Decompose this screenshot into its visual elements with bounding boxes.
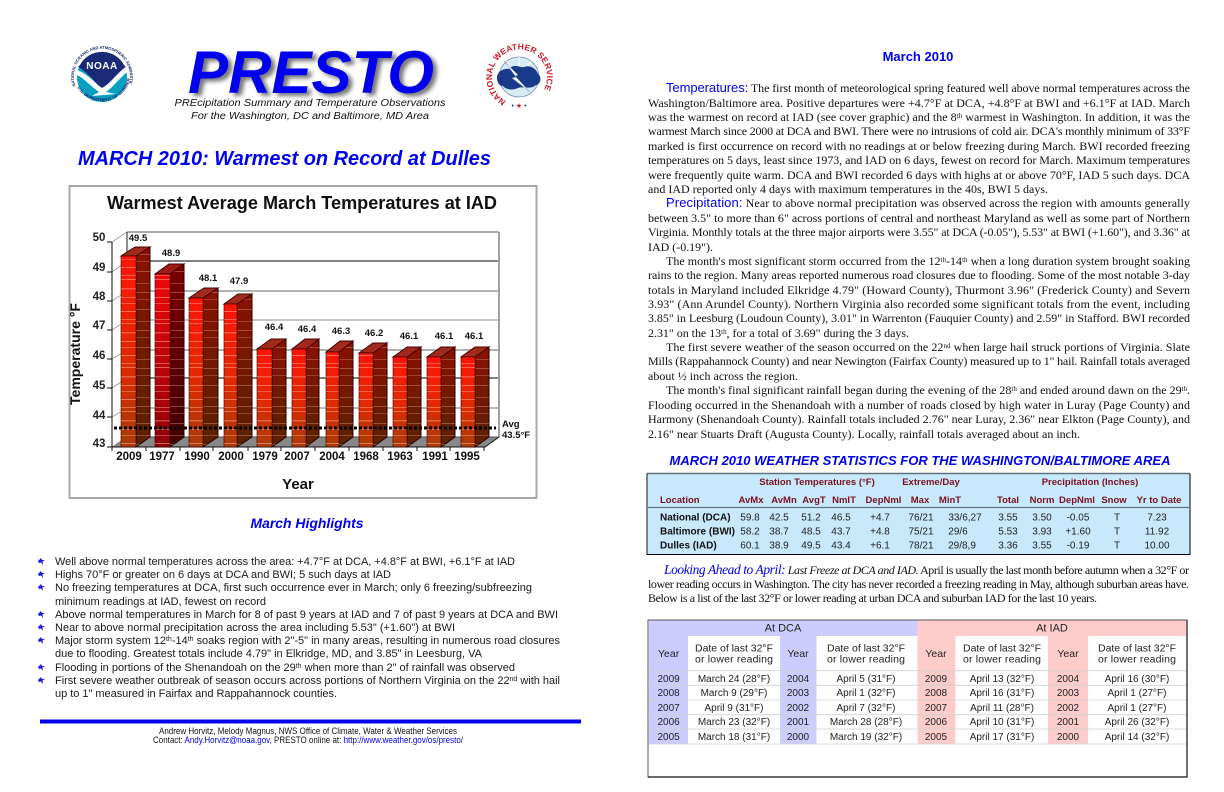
row: 2008 / 2003: March 9 (29°F) bbox=[701, 688, 767, 699]
y axis labels: 45 bbox=[93, 380, 106, 392]
table row: Baltimore: Baltimore (BWI) bbox=[660, 526, 735, 538]
table row: Dulles: 78/21 bbox=[908, 540, 934, 552]
table row: Baltimore: 43.7 bbox=[831, 526, 851, 538]
text block: highlights list: nd bbox=[510, 676, 517, 683]
table row: National: 3.55 bbox=[998, 512, 1018, 524]
x axis year labels: 2000 bbox=[218, 451, 244, 463]
text block: precipitation: when large hail struck portions of Virginia. Slate bbox=[951, 340, 1190, 354]
row: 2009 / 2004: 2009 bbox=[657, 674, 680, 685]
text block: temperatures bbox=[648, 80, 1190, 196]
table header: AvMn bbox=[771, 495, 797, 506]
footer rule bbox=[40, 720, 581, 724]
text block: looking ahead to April: Looking Ahead to April: Last Freeze at DCA and IAD. April is usually the last month before autumn when a 32°F or bbox=[663, 562, 1189, 577]
table row: National: 59.8 bbox=[740, 512, 760, 524]
row: 2007 / 2002: April 11 (28°F) bbox=[970, 703, 1034, 714]
text block: highlights list: First severe weather outbreak of season occurs across portions of Northern Virginia on the 22 bbox=[55, 675, 510, 687]
text block: precipitation: 2.31" on the 13 bbox=[648, 326, 721, 340]
table row: National: -0.05 bbox=[1067, 512, 1090, 524]
table row: National: 33/6,27 bbox=[948, 512, 982, 524]
text block: highlights list: -14 bbox=[172, 635, 188, 647]
subtitle bbox=[174, 97, 446, 122]
bar value labels: 49.5 bbox=[129, 233, 148, 244]
row: 2005 / 2000: 2005 bbox=[925, 732, 948, 743]
text block: precipitation: The month's final significant rainfall began during the evening of the 28 bbox=[666, 383, 1011, 397]
row: 2007 / 2002: 2002 bbox=[787, 703, 810, 714]
row: 2005 / 2000: 2000 bbox=[1057, 732, 1080, 743]
row: 2006 / 2001 bbox=[657, 717, 1169, 728]
table header: AvgT bbox=[802, 495, 826, 506]
row: 2008 / 2003 bbox=[657, 688, 1167, 699]
row: 2006 / 2001: 2001 bbox=[1057, 717, 1080, 728]
text block: precipitation: between 3.5" to more than 6" across portions of central and northeast Maryland as well as some part of Northern bbox=[648, 211, 1190, 225]
row: 2005 / 2000 bbox=[657, 732, 1169, 743]
table header: DepNml bbox=[866, 495, 901, 506]
column headers: Date of last 32°F bbox=[827, 642, 905, 654]
text block: highlights list: Near to above normal precipitation across the area including 5.53" (+1.60") at BWI bbox=[55, 622, 455, 634]
bar: 1979 bbox=[257, 339, 286, 447]
text block: precipitation: th bbox=[941, 256, 947, 264]
bar value labels: 47.9 bbox=[230, 276, 248, 287]
text block: precipitation: 2.16" near Stuarts Draft (Augusta County). Locally, rainfall totals averaged about an inch. bbox=[648, 427, 1080, 441]
row: 2006 / 2001: 2006 bbox=[925, 717, 948, 728]
table row: Dulles: 60.1 bbox=[740, 540, 760, 552]
table row: Baltimore: 38.7 bbox=[769, 526, 789, 538]
table row: Baltimore: 75/21 bbox=[908, 526, 934, 538]
table header: MinT bbox=[939, 495, 961, 506]
bar value labels: 46.1 bbox=[465, 331, 484, 342]
text block: temperatures: marked is first occurrence on record with no readings at or below freezing during March. BWI recorded freezing bbox=[648, 139, 1190, 153]
row: 2006 / 2001: March 23 (32°F) bbox=[698, 717, 770, 728]
text block: precipitation: . bbox=[1187, 383, 1190, 397]
table row: National: T bbox=[1114, 512, 1120, 524]
text block: highlights list: th bbox=[166, 636, 172, 643]
table row: Baltimore bbox=[660, 526, 1170, 538]
icon: NOAA logo: NOAA bbox=[86, 61, 118, 72]
row: 2008 / 2003: 2008 bbox=[925, 688, 948, 699]
bar: 2009 bbox=[121, 247, 150, 447]
x axis year labels: 1995 bbox=[454, 451, 480, 463]
x axis year labels: 2007 bbox=[284, 451, 310, 463]
text block: precipitation: Precipitation: Near to above normal precipitation was observed across the region with amounts generally bbox=[666, 195, 1190, 210]
text block: highlights list: when more than 2" of rainfall was observed bbox=[302, 662, 515, 674]
text block: highlights list: Flooding in portions of the Shenandoah on the 29 bbox=[55, 662, 296, 674]
text block: precipitation bbox=[648, 195, 1191, 441]
table row: Dulles: 43.4 bbox=[831, 540, 851, 552]
y axis labels: 43 bbox=[93, 438, 105, 450]
column headers: Year bbox=[925, 648, 947, 660]
table row: National: 3.50 bbox=[1032, 512, 1052, 524]
text block: looking ahead to April: lower reading occurs in Washington. The city has never recorded a freezing reading in May, although suburban areas have. bbox=[648, 577, 1189, 591]
table header: NmIT bbox=[832, 495, 856, 506]
row: 2007 / 2002 bbox=[657, 703, 1167, 714]
text block: highlights list: with hail bbox=[517, 675, 560, 687]
footer credits: Contact: Andy.Horvitz@noaa.gov, PRESTO online at: http://www.weather.gov/os/presto/ bbox=[153, 735, 463, 745]
text block: highlights list: Well above normal temperatures across the area: +4.7°F at DCA, +4.8°F at BWI, +6.1°F at IAD bbox=[55, 556, 515, 568]
row: 2005 / 2000: March 18 (31°F) bbox=[698, 732, 770, 743]
headline: MARCH 2010: Warmest on Record at Dulles bbox=[78, 148, 491, 170]
bar value labels: 46.3 bbox=[332, 326, 350, 337]
row: 2006 / 2001: 2006 bbox=[657, 717, 680, 728]
text block: precipitation: The month's most significant storm occurred from the 12 bbox=[666, 254, 941, 268]
table row: National: 42.5 bbox=[769, 512, 789, 524]
text block: highlights list: soaks region with 2"-5" in many areas, resulting in numerous road closures bbox=[194, 635, 561, 647]
column headers: or lower reading bbox=[827, 654, 905, 666]
table row: Dulles: Dulles (IAD) bbox=[660, 540, 717, 552]
table header: Station Temperatures (°F) bbox=[759, 477, 875, 488]
text block: highlights list: minimum readings at IAD, fewest on record bbox=[55, 596, 266, 608]
table row: Dulles: 49.5 bbox=[801, 540, 821, 552]
row: 2007 / 2002: April 7 (32°F) bbox=[836, 703, 896, 714]
text block: precipitation: th bbox=[721, 328, 727, 336]
table row: Baltimore: +4.8 bbox=[870, 526, 890, 538]
column headers: Year bbox=[1057, 648, 1079, 660]
text block: precipitation: 3.85" in Leesburg (Loudoun County), 3.01" in Warrenton (Fauquier County) and 2.59" in Stafford. BWI recorded bbox=[648, 311, 1190, 325]
average label: Avg bbox=[502, 419, 520, 430]
row: 2009 / 2004: April 13 (32°F) bbox=[970, 674, 1034, 685]
bar: 1963 bbox=[393, 347, 421, 447]
text block: precipitation: totals in Maryland included Elkridge 4.79" (Howard County), Thurmont 3.96" (Frederick County) and Severn bbox=[648, 283, 1190, 297]
bar: 2004 bbox=[326, 341, 353, 447]
text block: highlights list: up to 1" measured in Fairfax and Rappahannock counties. bbox=[55, 688, 337, 700]
text block: highlights list: th bbox=[188, 636, 194, 643]
table row: Baltimore: 29/6 bbox=[948, 526, 968, 538]
table header: Precipitation (Inches) bbox=[1042, 477, 1138, 488]
icon: National Weather Service logo: NATIONAL WEATHER SERVICE bbox=[486, 44, 553, 106]
text block: temperatures: warmest March since 2000 at DCA and BWI. There were no intrusions of cold air. DCA's monthly minimum of 33°F bbox=[648, 124, 1190, 138]
table: weather statistics bbox=[647, 474, 1190, 554]
row: 2006 / 2001: April 26 (32°F) bbox=[1105, 717, 1169, 728]
table row: National: 76/21 bbox=[908, 512, 934, 524]
table row: Dulles: 29/8,9 bbox=[948, 540, 976, 552]
text block: highlights list: th bbox=[296, 663, 302, 670]
subtitle: PREcipitation Summary and Temperature Observations bbox=[174, 97, 446, 109]
bar: 2007 bbox=[292, 339, 319, 447]
table header: Location bbox=[660, 495, 700, 506]
y axis labels: 46 bbox=[93, 350, 105, 362]
x axis year labels: 1991 bbox=[422, 451, 448, 463]
row: 2006 / 2001: March 28 (28°F) bbox=[830, 717, 902, 728]
row: 2009 / 2004: 2004 bbox=[787, 674, 810, 685]
column headers bbox=[658, 642, 1176, 666]
table row: Dulles: 3.55 bbox=[1032, 540, 1052, 552]
y axis labels: 49 bbox=[93, 262, 105, 274]
subtitle: For the Washington, DC and Baltimore, MD Area bbox=[191, 110, 429, 122]
x axis year labels: 1977 bbox=[149, 451, 175, 463]
row: 2006 / 2001: April 10 (31°F) bbox=[970, 717, 1034, 728]
column headers: Date of last 32°F bbox=[695, 642, 773, 654]
x axis year labels: 1990 bbox=[184, 451, 210, 463]
chart walls and gridlines bbox=[107, 232, 499, 451]
text block: precipitation: -14 bbox=[946, 254, 962, 268]
table row: Dulles: T bbox=[1114, 540, 1120, 552]
row: 2008 / 2003: 2003 bbox=[1057, 688, 1080, 699]
table row: National: +4.7 bbox=[870, 512, 890, 524]
bar value labels: 46.2 bbox=[365, 328, 383, 339]
text block: highlights list: due to flooding. Greatest totals include 4.79" in Elkridge, MD, and 3.85" in Leesburg, VA bbox=[55, 648, 483, 660]
bar: 1995 bbox=[461, 347, 489, 447]
table header: Yr to Date bbox=[1137, 495, 1181, 506]
text block: temperatures: Temperatures: The first month of meteorological spring featured well above normal temperatures across the bbox=[666, 80, 1190, 95]
text block: highlights list: Highs 70°F or greater on 6 days at DCA and BWI; 5 such days at IAD bbox=[55, 569, 391, 581]
table row: Baltimore: 48.5 bbox=[801, 526, 821, 538]
bar value labels: 46.4 bbox=[298, 324, 317, 335]
bar value labels: 48.1 bbox=[199, 273, 218, 284]
title: PRESTO: PRESTO bbox=[188, 39, 434, 106]
x axis year labels: 2009 bbox=[116, 451, 142, 463]
text block: precipitation: when a long duration system brought soaking bbox=[968, 254, 1190, 268]
row: 2005 / 2000: 2000 bbox=[787, 732, 810, 743]
text block: precipitation: Flooding occurred in the Shenandoah with a number of roads closed by high water in Luray (Page County) and bbox=[648, 398, 1190, 412]
text block: temperatures: was the warmest on record at IAD (see cover graphic) and the 8 bbox=[648, 110, 957, 124]
average line bbox=[114, 426, 496, 430]
y axis labels: 48 bbox=[93, 291, 106, 303]
text block: highlights list: Above normal temperatures in March for 8 of past 9 years at IAD and 7 of past 9 years at DCA and BWI bbox=[55, 609, 558, 621]
heading: March 2010: March 2010 bbox=[883, 49, 953, 64]
footer credits: Andrew Horvitz, Melody Magnus, NWS Office of Climate, Water & Weather Services bbox=[159, 726, 457, 736]
bar value labels bbox=[129, 233, 484, 342]
table: last freeze dates bbox=[648, 620, 1187, 777]
row: 2005 / 2000: 2005 bbox=[657, 732, 680, 743]
y axis labels: 47 bbox=[93, 320, 105, 332]
text block: temperatures: and IAD reported only 4 days with maximum temperatures in the 40s, BWI 5 days. bbox=[648, 182, 1048, 196]
text block: precipitation: rains to the region. Many areas reported numerous road closures due to flooding. Some of the most notable 3-day bbox=[648, 268, 1190, 282]
x axis year labels: 1979 bbox=[252, 451, 278, 463]
row: 2007 / 2002: 2007 bbox=[657, 703, 680, 714]
text block: highlights list: Major storm system 12 bbox=[55, 635, 166, 647]
heading: weather statistics: MARCH 2010 WEATHER STATISTICS FOR THE WASHINGTON/BALTIMORE AREA bbox=[670, 453, 1170, 468]
bar: 1968 bbox=[359, 343, 387, 447]
table row: Dulles: +6.1 bbox=[870, 540, 890, 552]
row: 2007 / 2002: April 1 (27°F) bbox=[1107, 703, 1167, 714]
bar: 1977 bbox=[155, 264, 184, 447]
table row: National: 7.23 bbox=[1147, 512, 1167, 524]
column headers: Date of last 32°F bbox=[963, 642, 1041, 654]
x axis year labels: 2004 bbox=[319, 451, 345, 463]
row: 2008 / 2003: April 16 (31°F) bbox=[970, 688, 1034, 699]
table header: Extreme/Day bbox=[902, 477, 960, 488]
row: 2009 / 2004: 2004 bbox=[1057, 674, 1080, 685]
y axis labels: 44 bbox=[93, 410, 106, 422]
text block: precipitation: and ended around dawn on the 29 bbox=[1017, 383, 1182, 397]
column headers: or lower reading bbox=[1098, 654, 1176, 666]
table row: Baltimore: T bbox=[1114, 526, 1120, 538]
column headers: or lower reading bbox=[695, 654, 773, 666]
bar value labels: 48.9 bbox=[162, 248, 180, 259]
text block: looking ahead to April bbox=[648, 562, 1189, 605]
text block: looking ahead to April: Below is a list of the last 32°F or lower reading at urban DCA and suburban IAD for the last 10 years. bbox=[648, 591, 1097, 605]
row: 2005 / 2000: April 14 (32°F) bbox=[1105, 732, 1169, 743]
row: 2007 / 2002: 2002 bbox=[1057, 703, 1080, 714]
text block: temperatures: warmest in Washington. In addition, it was the bbox=[962, 110, 1190, 124]
text block: precipitation: nd bbox=[943, 342, 951, 350]
table row: National: National (DCA) bbox=[660, 512, 731, 524]
text block: highlights list: No freezing temperatures at DCA, first such occurrence ever in March; only 6 freezing/subfreezing bbox=[55, 582, 532, 594]
row: 2009 / 2004: April 5 (31°F) bbox=[836, 674, 896, 685]
y axis labels: 50 bbox=[93, 232, 105, 244]
bar: 1990 bbox=[189, 288, 218, 447]
table row: Dulles: -0.19 bbox=[1067, 540, 1090, 552]
text block: precipitation: , for a total of 3.69" during the 3 days. bbox=[727, 326, 909, 340]
row: 2008 / 2003: 2008 bbox=[657, 688, 680, 699]
icon: NOAA logo bbox=[71, 46, 133, 102]
table row: National: 51.2 bbox=[801, 512, 821, 524]
y axis labels bbox=[93, 232, 106, 450]
text block: precipitation: IAD (-0.19"). bbox=[648, 240, 713, 254]
panel: bar chart of warmest March temperatures bbox=[67, 186, 536, 498]
icon: National Weather Service logo: • ★ • bbox=[511, 102, 527, 110]
row: 2009 / 2004: March 24 (28°F) bbox=[698, 674, 770, 685]
table row: Dulles: 3.36 bbox=[998, 540, 1018, 552]
table header: Total bbox=[997, 495, 1019, 506]
table row: Baltimore: 11.92 bbox=[1145, 526, 1170, 538]
table header bbox=[660, 477, 1181, 506]
row: 2008 / 2003: 2003 bbox=[787, 688, 810, 699]
text block: temperatures: th bbox=[957, 112, 963, 120]
footer credits bbox=[153, 726, 463, 745]
table header: Snow bbox=[1101, 495, 1127, 506]
x axis title: Year bbox=[282, 476, 314, 493]
table row: Baltimore: +1.60 bbox=[1065, 526, 1091, 538]
bar: 2000 bbox=[224, 294, 252, 447]
average label: 43.5°F bbox=[502, 430, 530, 441]
column headers: Year bbox=[658, 648, 680, 660]
text block: temperatures: Washington/Baltimore area. Positive departures were +4.7°F at DCA, +4.8°F at BWI and +6.1°F at IAD. March bbox=[648, 96, 1190, 110]
table row: Baltimore: 3.93 bbox=[1032, 526, 1052, 538]
text block: precipitation: The first severe weather of the season occurred on the 22 bbox=[666, 340, 943, 354]
text block: precipitation: 3.93" (Ann Arundel County). Northern Virginia also recorded some significant totals from the event, including bbox=[648, 297, 1190, 311]
table row: Dulles bbox=[660, 540, 1170, 552]
table header: AvMx bbox=[738, 495, 764, 506]
x axis year labels: 1963 bbox=[387, 451, 413, 463]
table row: National: 46.5 bbox=[831, 512, 851, 524]
text block: precipitation: th bbox=[962, 256, 968, 264]
table header: DepNml bbox=[1059, 495, 1095, 506]
text block: precipitation: Mills (Rappahannock County) and near Newington (Fairfax County) measured up to 1" hail. Rainfall totals averaged bbox=[648, 354, 1190, 368]
column headers: Year bbox=[787, 648, 809, 660]
heading: March Highlights: March Highlights bbox=[250, 515, 364, 531]
x axis year labels: 1968 bbox=[353, 451, 379, 463]
x axis year labels bbox=[116, 451, 480, 463]
table row: Dulles: 38.9 bbox=[769, 540, 789, 552]
row: 2009 / 2004 bbox=[657, 674, 1169, 685]
bar value labels: 46.1 bbox=[435, 331, 454, 342]
bar: 1991 bbox=[427, 347, 455, 447]
row: 2008 / 2003: April 1 (32°F) bbox=[836, 688, 896, 699]
text block: precipitation: th bbox=[1182, 385, 1188, 393]
row: 2009 / 2004: 2009 bbox=[925, 674, 948, 685]
text block: precipitation: about ½ inch across the region. bbox=[648, 369, 798, 383]
chart title: Warmest Average March Temperatures at IAD bbox=[107, 193, 497, 213]
group header: At DCA: At DCA bbox=[765, 622, 802, 634]
y axis title: Temperature °F bbox=[67, 303, 83, 405]
table row: Baltimore: 58.2 bbox=[740, 526, 760, 538]
row: 2005 / 2000: April 17 (31°F) bbox=[970, 732, 1034, 743]
row: 2007 / 2002: April 9 (31°F) bbox=[704, 703, 764, 714]
table row: Dulles: 10.00 bbox=[1144, 540, 1170, 552]
row: 2007 / 2002: 2007 bbox=[925, 703, 948, 714]
bar value labels: 46.4 bbox=[265, 322, 284, 333]
table row: National bbox=[660, 512, 1167, 524]
text block: highlights list bbox=[55, 556, 560, 700]
text block: precipitation: Virginia. Monthly totals at the three major airports were 3.55" at DCA (-0.05"), 5.53" at BWI (+1.60"), and 3.36" at bbox=[648, 225, 1191, 239]
row: 2005 / 2000: March 19 (32°F) bbox=[830, 732, 902, 743]
column headers: Date of last 32°F bbox=[1098, 642, 1176, 654]
bullet icons bbox=[38, 558, 45, 684]
row: 2009 / 2004: April 16 (30°F) bbox=[1105, 674, 1169, 685]
column headers: or lower reading bbox=[963, 654, 1041, 666]
table header: Norm bbox=[1030, 495, 1054, 506]
table row: Baltimore: 5.53 bbox=[998, 526, 1018, 538]
row: 2006 / 2001: 2001 bbox=[787, 717, 810, 728]
text block: temperatures: were frequently quite warm. DCA and BWI recorded 6 days with highs at or above 70°F, IAD 5 such days. DCA bbox=[648, 168, 1190, 182]
text block: precipitation: Harmony (Shenandoah County). Rainfall totals included 2.76" near Luray, 2.36" near Elkton (Page County), and bbox=[648, 412, 1190, 426]
bar value labels: 46.1 bbox=[400, 331, 419, 342]
table header: Max bbox=[911, 495, 930, 506]
text block: temperatures: temperatures on 5 days, least since 1973, and IAD on 6 days, fewest on record for March. Maximum temperatures bbox=[648, 153, 1190, 167]
text block: precipitation: th bbox=[1011, 385, 1017, 393]
row: 2008 / 2003: April 1 (27°F) bbox=[1107, 688, 1167, 699]
group header: At IAD: At IAD bbox=[1036, 622, 1068, 634]
